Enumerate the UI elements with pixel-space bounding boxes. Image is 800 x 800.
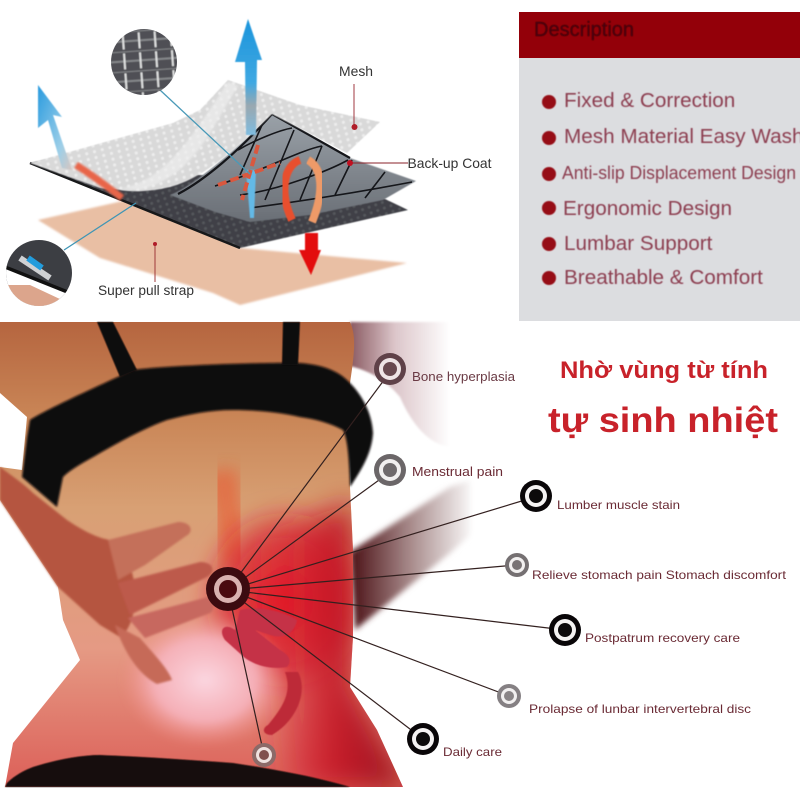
feature list bbox=[542, 89, 800, 289]
marker: bottom bbox=[252, 743, 276, 767]
heat glow bbox=[194, 500, 353, 696]
bra band bbox=[22, 363, 373, 507]
marker: postpartum recovery care: Postpatrum recovery care bbox=[585, 631, 740, 645]
coat quilting lines bbox=[178, 114, 412, 208]
shadow of arm, upper right bbox=[350, 322, 450, 447]
hot right flank bbox=[255, 500, 410, 790]
marker: daily care: Daily care bbox=[443, 745, 502, 759]
shadow of arm, lower right bbox=[350, 480, 470, 630]
mesh callout marker bbox=[339, 64, 373, 130]
marker: bone hyperplasia: Bone hyperplasia bbox=[412, 370, 515, 384]
list item 4: Ergonomic Design bbox=[563, 197, 732, 220]
mesh callout marker: Mesh bbox=[339, 64, 373, 79]
marker: daily care bbox=[407, 723, 502, 759]
list item 5: Lumbar Support bbox=[564, 232, 713, 255]
forearm and back of hand bbox=[0, 467, 135, 637]
orange heat curve bbox=[308, 160, 320, 222]
list item 3: Anti-slip Displacement Design bbox=[562, 163, 796, 183]
torso bbox=[0, 322, 410, 790]
ring finger bbox=[128, 597, 214, 638]
panel: lower back photo illustration bbox=[0, 322, 787, 790]
super pull strap callout: Super pull strap bbox=[98, 283, 194, 298]
panel background bbox=[519, 58, 800, 321]
mesh fold highlight bbox=[120, 82, 238, 190]
pale glow centre bbox=[130, 617, 286, 742]
bra straps bbox=[97, 322, 300, 377]
heading: heat callout: Nhờ vùng từ tính bbox=[560, 357, 768, 384]
icon: left blue arrow bbox=[38, 85, 122, 198]
index finger bbox=[108, 522, 191, 580]
marker: stomach pain bbox=[505, 553, 787, 582]
red heat curve bbox=[284, 160, 300, 220]
dark lower layer bbox=[30, 155, 408, 248]
central target marker bbox=[206, 567, 250, 611]
spine shading bbox=[222, 470, 236, 565]
marker: menstrual pain: Menstrual pain bbox=[412, 465, 503, 479]
panel: fabric layers diagram bbox=[5, 19, 492, 310]
marker: lumber muscle stain bbox=[520, 480, 680, 512]
icon: red arrow down bbox=[299, 233, 321, 275]
thumb bbox=[115, 625, 172, 684]
icon: mesh magnifier bbox=[105, 25, 250, 174]
middle finger bbox=[118, 562, 212, 615]
description header: Description bbox=[534, 19, 634, 41]
mesh top layer bbox=[30, 80, 380, 191]
marker: prolapse of disc: Prolapse of lunbar intervertebral disc bbox=[529, 702, 751, 716]
right hand fingers bbox=[222, 608, 302, 735]
marker: lumber muscle stain: Lumber muscle stain bbox=[557, 498, 680, 512]
super pull strap callout bbox=[98, 242, 194, 298]
description header bbox=[519, 12, 800, 58]
connector lines bbox=[228, 372, 565, 755]
list item 1: Fixed & Correction bbox=[564, 89, 735, 112]
black fabric edge bbox=[30, 163, 240, 248]
list item 2: Mesh Material Easy Wash bbox=[564, 125, 800, 148]
back-up coat layer bbox=[170, 114, 416, 222]
panel: description bbox=[519, 12, 800, 321]
heading: heat callout: tự sinh nhiệt bbox=[548, 401, 778, 440]
marker: prolapse of disc bbox=[497, 684, 751, 716]
lower garment bbox=[5, 755, 350, 787]
red dashes in coat bbox=[218, 145, 280, 200]
marker: bone hyperplasia bbox=[374, 353, 515, 385]
marker: menstrual pain bbox=[374, 454, 503, 486]
list item 6: Breathable & Comfort bbox=[564, 266, 763, 289]
back-up coat callout bbox=[347, 155, 492, 171]
heading: heat callout bbox=[548, 357, 778, 440]
left arm and hand bbox=[0, 467, 214, 684]
skin-coloured super pull strap layer bbox=[38, 198, 407, 305]
marker: postpartum recovery care bbox=[549, 614, 740, 646]
icon: centre blue arrow up bbox=[235, 19, 262, 135]
centre blue down stream bbox=[246, 170, 256, 218]
icon: strap magnifier bbox=[5, 203, 136, 310]
marker: stomach pain: Relieve stomach pain Stomach discomfort bbox=[532, 568, 787, 582]
back-up coat callout: Back-up Coat bbox=[408, 155, 492, 171]
